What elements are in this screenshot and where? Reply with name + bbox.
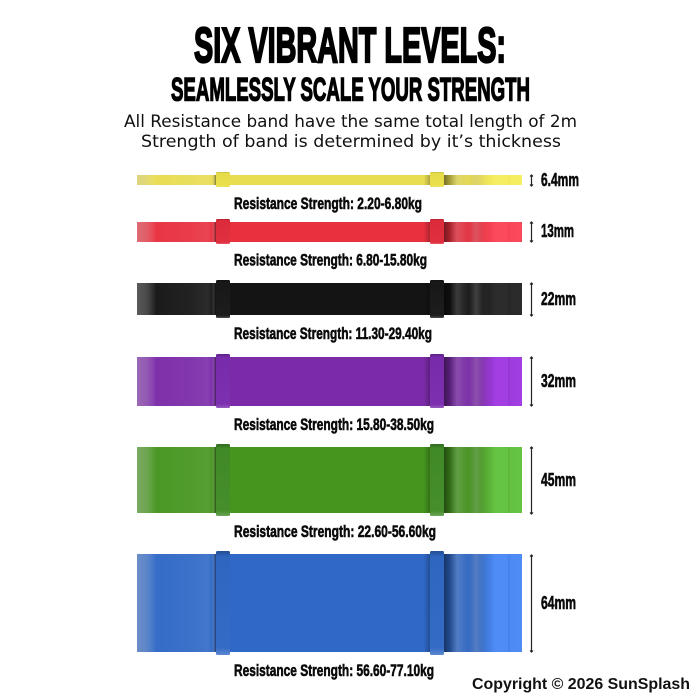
green thickness marker bbox=[530, 447, 576, 514]
panel: black band level bbox=[137, 280, 576, 343]
blue strength label: Resistance Strength: 56.60-77.10kg bbox=[234, 661, 434, 680]
red strength label: Resistance Strength: 6.80-15.80kg bbox=[234, 250, 427, 270]
panel: green band level bbox=[137, 444, 576, 541]
blue band bbox=[137, 551, 522, 655]
purple thickness marker bbox=[530, 357, 576, 406]
red thickness marker bbox=[530, 221, 574, 242]
yellow band bbox=[137, 172, 522, 187]
description text bbox=[124, 112, 577, 151]
yellow strength label: Resistance Strength: 2.20-6.80kg bbox=[234, 194, 422, 213]
yellow thickness marker: 6.4mm bbox=[541, 170, 579, 190]
copyright notice: Copyright © 2026 SunSplash bbox=[472, 676, 690, 693]
green band bbox=[137, 444, 522, 516]
purple strength label: Resistance Strength: 15.80-38.50kg bbox=[234, 415, 434, 434]
black band bbox=[137, 280, 522, 318]
green strength label: Resistance Strength: 22.60-56.60kg bbox=[234, 522, 436, 541]
panel: blue band level bbox=[137, 551, 576, 680]
yellow thickness marker bbox=[530, 170, 579, 190]
purple band bbox=[137, 354, 522, 408]
green thickness marker: 45mm bbox=[541, 470, 576, 490]
panel: yellow band level bbox=[137, 170, 579, 213]
blue thickness marker: 64mm bbox=[541, 593, 576, 613]
description text: Strength of band is determined by it’s thickness bbox=[141, 132, 561, 151]
panel: purple band level bbox=[137, 354, 576, 434]
blue thickness marker bbox=[530, 555, 576, 652]
red thickness marker: 13mm bbox=[541, 221, 574, 241]
black thickness marker: 22mm bbox=[541, 289, 576, 309]
black thickness marker bbox=[530, 283, 576, 316]
black strength label: Resistance Strength: 11.30-29.40kg bbox=[234, 324, 432, 343]
purple thickness marker: 32mm bbox=[541, 371, 576, 391]
red band bbox=[137, 219, 522, 244]
panel: red band level bbox=[137, 219, 574, 270]
description text: All Resistance band have the same total length of 2m bbox=[124, 112, 577, 131]
